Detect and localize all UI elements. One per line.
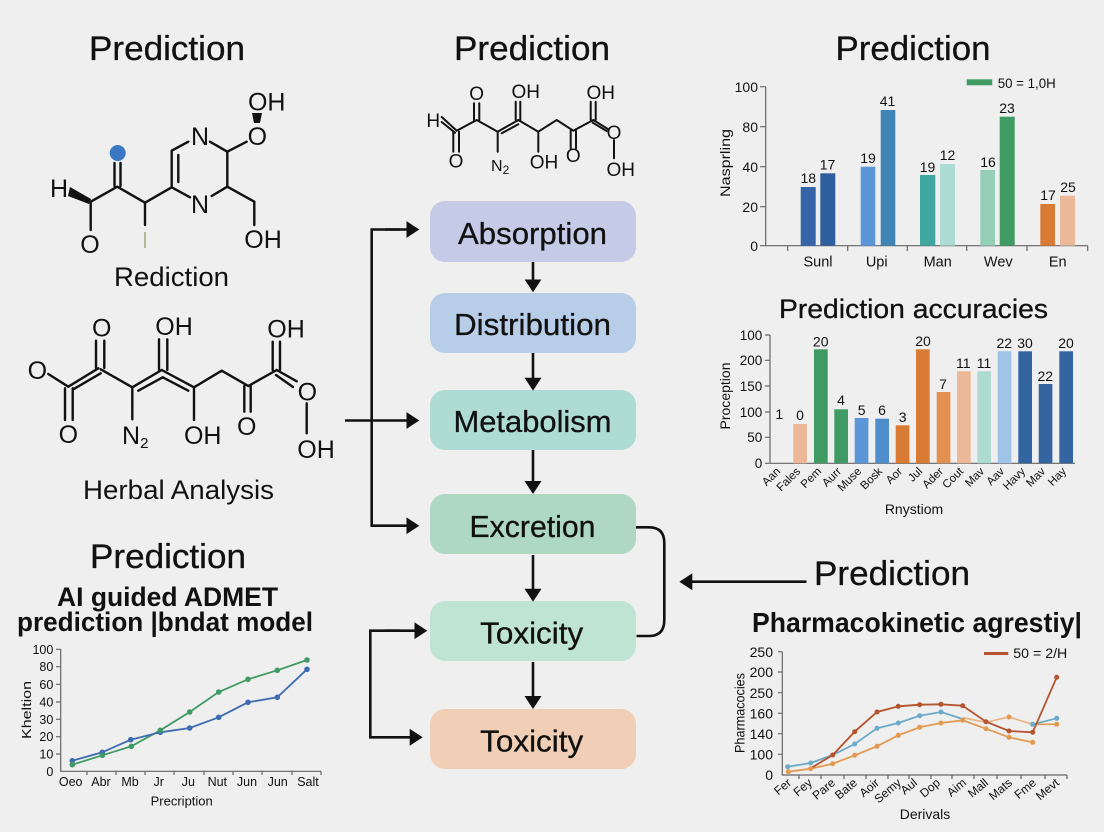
bar chart: prediction accuracies: Aurr (820, 466, 844, 489)
molecule: herbal structure: O (28, 357, 47, 385)
molecule: herbal structure: OH (155, 313, 193, 341)
bar chart: prediction accuracies: Cout (940, 465, 967, 491)
arrow: distribution to metabolism (532, 353, 534, 388)
bar chart: top right: Nasprling (718, 129, 733, 197)
bar chart: top right: 41 (880, 93, 895, 109)
bar chart: prediction accuracies: Proception (718, 362, 733, 430)
molecule: herbal structure: O (59, 421, 78, 449)
molecule: top center structure: OH (606, 160, 635, 181)
line chart: lower right: Mats (986, 776, 1015, 803)
bar chart: prediction accuracies: Hay (1046, 465, 1069, 489)
flow box: excretion: Excretion (470, 510, 596, 544)
bar chart: prediction accuracies: 20 (915, 333, 931, 349)
connector: excretion to toxicity right bracket (636, 527, 664, 636)
arrow: toxicity to toxicity (532, 662, 534, 706)
line chart: lower left: 0 (46, 765, 53, 779)
bar chart: prediction accuracies: Pem (799, 466, 824, 491)
bar chart: prediction accuracies: 200 (740, 353, 762, 368)
bar chart: top right: 17 (820, 156, 835, 172)
bar chart: top right: 16 (980, 154, 996, 170)
legend (984, 645, 1067, 661)
molecule: top center structure: O (607, 123, 621, 144)
line chart: lower left: 60 (39, 678, 53, 692)
heading: pharmacokinetic: Pharmacokinetic agrestiy| (752, 607, 1082, 638)
bar chart: top right (718, 75, 1088, 270)
molecule: top center structure: N (491, 158, 503, 175)
flow box: distribution (430, 293, 636, 353)
molecule: top center structure: O (566, 146, 581, 167)
molecule: top left structure: N (191, 123, 209, 151)
line chart: lower right: Fer (771, 776, 794, 798)
legend: 50 = 2/H (1013, 645, 1067, 661)
bar chart: prediction accuracies: 11 (956, 355, 971, 371)
molecule: herbal structure: N (122, 422, 140, 450)
bar chart: top right: 40 (742, 159, 758, 175)
line chart: lower right: 250 (750, 685, 773, 701)
line chart: lower left: Abr (91, 775, 111, 789)
line chart: lower left: 80 (39, 660, 53, 674)
bar chart: prediction accuracies: 6 (878, 402, 886, 418)
heading: lower right prediction: Prediction (814, 555, 970, 593)
heading: top center prediction: Prediction (454, 30, 610, 68)
arrow: bracket to lower toxicity (370, 631, 420, 737)
molecule: top center structure: OH (586, 83, 615, 104)
bar chart: prediction accuracies: 3 (899, 409, 907, 425)
line chart: lower right: Dop (917, 775, 943, 800)
bar chart: prediction accuracies: 30 (1017, 335, 1033, 351)
bar chart: prediction accuracies: Aan (760, 466, 783, 489)
bar chart: prediction accuracies: Aav (985, 465, 1007, 488)
flow box: toxicity orange (430, 709, 636, 769)
line chart: lower left: Jr (153, 775, 164, 789)
legend (967, 75, 1056, 91)
flow box: metabolism: Metabolism (454, 405, 612, 439)
arrow: excretion to toxicity (532, 555, 534, 599)
bar chart: top right: Man (924, 254, 952, 270)
molecule: herbal structure: O (237, 413, 256, 441)
line chart: lower right (732, 644, 1067, 822)
molecule: top center structure: O (469, 84, 484, 105)
line chart: lower left: Nut (208, 775, 228, 789)
bar chart: prediction accuracies: Ader (920, 466, 946, 491)
flow box: absorption: Absorption (458, 217, 607, 251)
bar chart: prediction accuracies (718, 328, 1075, 517)
arrow: bracket to excretion (372, 230, 416, 526)
molecule: top left structure: N (191, 191, 209, 219)
line chart: lower right: Aoir (857, 776, 882, 800)
arrow: prediction to pipeline (682, 580, 806, 583)
molecule: herbal structure (28, 313, 335, 464)
molecule: herbal structure: O (298, 379, 317, 407)
bar chart: prediction accuracies: 22 (1038, 368, 1053, 384)
line chart: lower right: 100 (750, 746, 773, 762)
line chart: lower right: Mall (965, 776, 991, 800)
flow box: absorption (430, 201, 636, 262)
bar chart: prediction accuracies: Fales (775, 465, 803, 494)
line chart: lower right: 160 (750, 706, 773, 722)
line chart: lower right: Bate (832, 775, 860, 802)
line chart: lower left: 10 (39, 748, 53, 762)
heading: top left prediction: Prediction (89, 30, 245, 68)
bar chart: prediction accuracies: 1 (775, 406, 783, 422)
flow box: toxicity (430, 601, 636, 661)
molecule: top center structure (426, 82, 635, 181)
bar chart: prediction accuracies: 4 (837, 392, 845, 408)
line chart: lower left: Precription (151, 794, 213, 808)
arrow: absorption to distribution (532, 262, 534, 289)
bar chart: prediction accuracies: Muse (836, 466, 864, 494)
legend: 50 = 1,0H (998, 75, 1056, 91)
line chart: lower left: 40 (39, 696, 53, 710)
molecule: top center structure: O (449, 152, 463, 172)
bar chart: prediction accuracies: 100 (740, 405, 762, 420)
bar chart: top right: Upi (866, 254, 888, 270)
line chart: lower left: Mb (121, 775, 139, 789)
bar chart: prediction accuracies: 20 (813, 334, 829, 350)
line chart: lower left: Oeo (59, 775, 83, 789)
heading: prediction accuracies: Prediction accuracies (779, 294, 1048, 324)
molecule: top left structure: O (248, 123, 267, 151)
molecule: top left structure: OH (244, 226, 282, 254)
line chart: lower right: Aim (944, 776, 969, 800)
line chart: lower right: 200 (750, 664, 773, 680)
line chart: lower right: Pharmacocies (732, 673, 748, 753)
line chart: lower right: 140 (750, 726, 773, 742)
bar chart: prediction accuracies: Mav (963, 465, 987, 489)
line chart: lower left: 100 (32, 643, 53, 657)
line chart: lower right: Pare (810, 775, 838, 803)
molecule: top left structure: H (50, 175, 68, 203)
molecule: top center structure: H (426, 111, 440, 132)
line chart: lower right: Fme (1012, 775, 1039, 802)
line chart: lower left: Ju (182, 775, 195, 789)
bar chart: top right: Wev (984, 254, 1013, 270)
line chart: lower left: Jun (237, 775, 257, 789)
bar chart: prediction accuracies: 5 (858, 402, 866, 418)
heading: AI guided ADMET: AI guided ADMET (57, 582, 278, 612)
bar chart: top right: 100 (735, 79, 758, 95)
bar chart: top right: 25 (1060, 179, 1076, 195)
bar chart: top right: 20 (742, 199, 758, 215)
bar chart: prediction accuracies: 0 (796, 407, 804, 423)
molecule: top center structure: OH (530, 152, 558, 174)
flow box: metabolism (430, 390, 636, 450)
line chart: lower left: 30 (39, 713, 53, 727)
arrow: metabolism to excretion (532, 450, 534, 491)
heading: prediction model: prediction |bndat model (17, 607, 313, 637)
label: rediction: Rediction (114, 262, 229, 292)
line chart: lower left (19, 643, 321, 808)
bar chart: prediction accuracies: 150 (740, 379, 762, 394)
bar chart: prediction accuracies: Jul (906, 466, 925, 485)
bar chart: prediction accuracies: 22 (997, 335, 1012, 351)
bar chart: top right: 23 (999, 100, 1015, 116)
label: herbal analysis: Herbal Analysis (83, 475, 274, 505)
bar chart: prediction accuracies: 20 (1058, 335, 1074, 351)
line chart: lower right: Mevt (1033, 775, 1062, 803)
line chart: lower right: Derivals (900, 806, 950, 822)
bar chart: top right: En (1049, 254, 1067, 270)
line chart: lower right: 0 (765, 767, 773, 783)
bar chart: top right: Sunl (803, 254, 833, 270)
bar chart: prediction accuracies: 50 (747, 430, 762, 445)
flow box: distribution: Distribution (454, 308, 611, 342)
molecule: top left structure (50, 88, 285, 259)
line chart: lower right: Semy (871, 776, 904, 806)
molecule: herbal structure: OH (267, 316, 305, 344)
molecule: top left structure: O (80, 231, 100, 259)
arrow: lower bracket head (385, 629, 424, 632)
bar chart: top right: 17 (1040, 187, 1056, 203)
bar chart: top right: 19 (920, 159, 935, 175)
line chart: lower left: Jun (268, 775, 288, 789)
line chart: lower right: Aul (898, 776, 920, 797)
heading: top right prediction: Prediction (836, 30, 990, 68)
bar chart: top right: 18 (801, 170, 816, 186)
bar chart: top right: 12 (940, 147, 955, 163)
bar chart: top right: 80 (742, 119, 758, 135)
bar chart: prediction accuracies: Rnystiom (885, 501, 943, 517)
heading: lower left prediction: Prediction (90, 538, 246, 576)
molecule: top left structure: OH (248, 88, 285, 116)
bar chart: prediction accuracies: 0 (755, 456, 762, 471)
molecule: top center structure: OH (511, 82, 540, 103)
molecule: top center structure: 2 (503, 163, 510, 177)
arrow: herbal analysis to metabolism (345, 419, 416, 422)
bar chart: prediction accuracies: Bosk (859, 465, 885, 492)
line chart: lower right: 250 (750, 644, 773, 660)
bar chart: top right: 0 (750, 238, 758, 254)
line chart: lower right: Fey (791, 776, 815, 799)
bar chart: prediction accuracies: Aor (884, 466, 905, 487)
bar chart: top right: 19 (860, 150, 876, 166)
molecule: herbal structure: OH (184, 422, 221, 450)
bar chart: prediction accuracies: 7 (939, 376, 947, 392)
bar chart: prediction accuracies: 100 (740, 328, 762, 343)
line chart: lower left: Salt (297, 775, 319, 789)
bar chart: prediction accuracies: Mav (1024, 465, 1048, 489)
flow box: toxicity orange: Toxicity (480, 724, 584, 758)
line chart: lower left: 20 (39, 730, 53, 744)
molecule: herbal structure: OH (297, 436, 335, 464)
molecule: herbal structure: 2 (140, 435, 148, 452)
arrow: upper bracket head (385, 228, 416, 231)
flow box: excretion (430, 494, 636, 554)
bar chart: prediction accuracies: 11 (977, 355, 991, 371)
line chart: lower left: Kheltion (19, 681, 34, 739)
molecule: herbal structure: O (92, 314, 111, 342)
bar chart: prediction accuracies: Havy (1001, 465, 1028, 493)
flow box: toxicity: Toxicity (480, 616, 584, 650)
